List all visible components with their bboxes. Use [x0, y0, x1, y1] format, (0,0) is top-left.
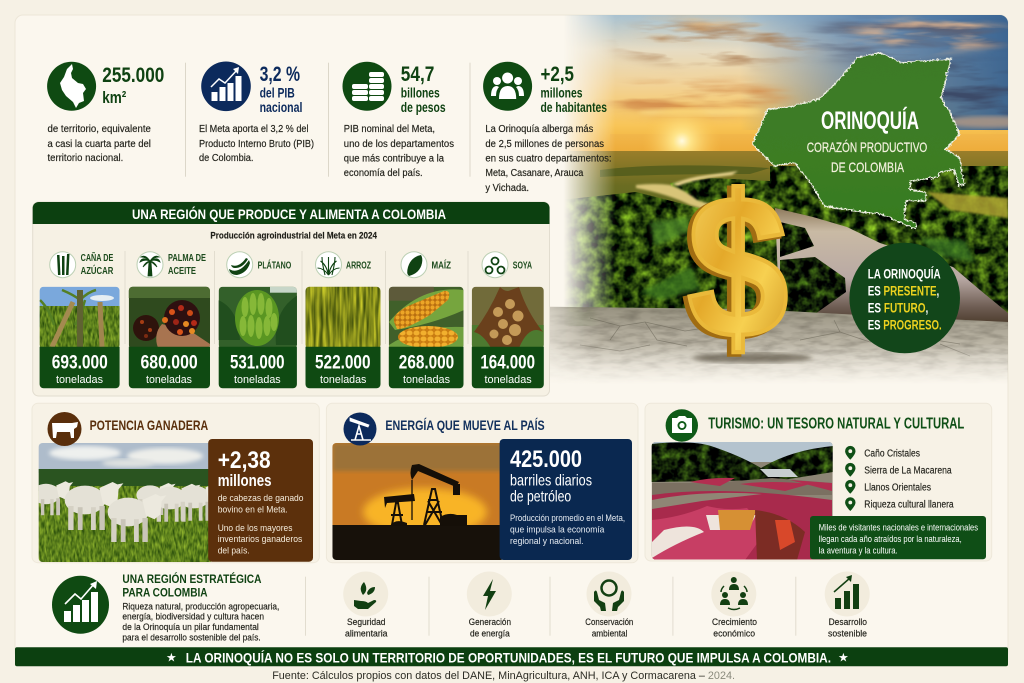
icon: bar chart trend [201, 62, 251, 111]
pillar: desarrollo sostenible [825, 572, 870, 638]
stat: territorio: territorio nacional. [48, 153, 123, 164]
callout: barriles diarios: que impulsa la economía [510, 524, 605, 536]
callout: cabezas de ganado: bovino en el Meta. [218, 504, 288, 516]
crop: soya: 164.000 [480, 352, 535, 374]
stat: PIB nacional: del PIB [260, 84, 295, 100]
divider [328, 63, 329, 177]
crop: maíz: 268.000 [399, 352, 454, 374]
heading bar [33, 202, 549, 224]
heading: POTENCIA GANADERA [90, 417, 208, 433]
divider [185, 63, 186, 177]
pillar: seguridad alimentaria: alimentaria [345, 628, 388, 638]
callout: barriles diarios [500, 439, 632, 560]
panel: turismo [645, 403, 992, 561]
closing banner: LA ORINOQUÍA NO ES SOLO UN TERRITORIO DE OPORTUNIDADES, ES EL FUTURO QUE IMPULSA A COLOMBIA. [186, 649, 831, 665]
callout: presente, futuro, progreso: ES PROGRESO. [868, 317, 942, 332]
callout: barriles diarios: de petróleo [510, 488, 571, 506]
callout: visitantes [810, 516, 986, 559]
map subtitle: DE COLOMBIA [831, 159, 904, 175]
photo: Caño Cristales [651, 442, 833, 560]
icon: cow [48, 412, 82, 446]
stat: habitantes: de 2,5 millones de personas [485, 139, 604, 150]
subtitle: Producción agroindustrial del Meta en 2024 [210, 230, 378, 241]
panel: energía [326, 403, 638, 563]
callout: visitantes: Miles de visitantes nacionales e internacionales [819, 522, 978, 533]
callout: barriles diarios: regional y nacional. [510, 536, 584, 547]
dollar shadow [692, 353, 812, 363]
pillar: generación de energía: de energía [470, 628, 510, 638]
crop: palma de aceite: PALMA DE [168, 253, 206, 264]
crop: palma de aceite: ACEITE [168, 266, 196, 277]
pillar: desarrollo sostenible: sostenible [828, 628, 867, 638]
stat: billones de pesos [342, 62, 454, 179]
crop: arroz [306, 252, 380, 388]
callout: barriles diarios: 425.000 [510, 446, 582, 473]
pillar: conservación ambiental: ambiental [592, 628, 628, 638]
callout: cabezas de ganado: Uno de los mayores [218, 523, 293, 534]
stat: PIB nacional: El Meta aporta el 3,2 % del [199, 124, 308, 135]
divider [470, 63, 471, 177]
crop: soya [472, 252, 544, 388]
panel: producción agroindustrial [33, 202, 549, 396]
closing banner: ★ [166, 650, 177, 664]
pillar: generación de energía [467, 572, 512, 638]
crop: palma de aceite: toneladas [146, 374, 192, 386]
pillar: seguridad alimentaria: Seguridad [347, 617, 386, 627]
icon: gold dollar sign: $ [683, 155, 784, 382]
callout: visitantes: llegan cada año atraídos por la naturaleza, [819, 534, 962, 545]
list: destinos: Caño Cristales [864, 448, 920, 459]
section: región estratégica: Riqueza natural, producción agropecuaria, [122, 601, 279, 611]
list: destinos: Sierra de La Macarena [864, 465, 952, 476]
callout: cabezas de ganado: de cabezas de ganado [218, 493, 304, 504]
section: región estratégica: para el desarrollo sostenible del país. [122, 633, 261, 643]
icon: Colombia silhouette [47, 62, 96, 111]
stat: billones de pesos: PIB nominal del Meta, [344, 124, 435, 135]
crop: plátano: toneladas [234, 374, 281, 386]
crop: plátano [218, 252, 298, 388]
stat: billones de pesos: uno de los departamentos [344, 139, 454, 150]
crop: plátano: PLÁTANO [258, 258, 291, 272]
crop: arroz: ARROZ [346, 260, 371, 272]
stat: territorio: 255.000 [102, 64, 164, 87]
photo: cattle [38, 443, 212, 562]
callout: barriles diarios: barriles diarios [510, 472, 592, 490]
crop: maíz: MAÍZ [432, 258, 451, 272]
crop: arroz: toneladas [320, 374, 367, 386]
crop: caña de azúcar: CAÑA DE [81, 251, 114, 264]
pillar: crecimiento económico: económico [713, 628, 755, 638]
stat: billones de pesos: billones [401, 84, 440, 100]
stat: habitantes: de habitantes [540, 99, 607, 115]
map title: ORINOQUÍA [821, 106, 919, 135]
crop: plátano: 531.000 [230, 352, 284, 374]
crop: caña de azúcar: AZÚCAR [81, 264, 114, 277]
icon: camera [666, 409, 698, 442]
icon: coins [342, 62, 392, 111]
callout: cabezas de ganado: +2,38 [218, 447, 271, 474]
stat: PIB nacional: nacional [260, 99, 302, 115]
crop: maíz [389, 252, 464, 388]
pillar: seguridad alimentaria [343, 572, 388, 638]
section: región estratégica: energía, biodiversidad y cultura hacen [122, 612, 264, 622]
icon: growth chart [52, 576, 109, 634]
icon: people [483, 62, 532, 111]
map subtitle: CORAZÓN PRODUCTIVO [807, 139, 927, 155]
pillar: crecimiento económico [711, 572, 757, 638]
stat: habitantes: millones [540, 84, 583, 100]
stat: territorio: a casi la cuarta parte del [48, 139, 151, 150]
stat: habitantes: en sus cuatro departamentos: [485, 154, 612, 164]
crop: caña de azúcar: toneladas [56, 374, 103, 386]
crop: palma de aceite [128, 252, 211, 388]
source: Fuente: Cálculos propios con datos del DANE, MinAgricultura, ANH, ICA y Cormacarena – 2024. [272, 670, 735, 682]
map: Orinoquía [752, 52, 963, 228]
pillar: conservación ambiental [585, 572, 633, 638]
callout: visitantes: la aventura y la cultura. [819, 546, 898, 557]
pillar: conservación ambiental: Conservación [585, 617, 633, 627]
crop: arroz: 522.000 [315, 352, 370, 374]
stat: PIB nacional [199, 62, 314, 164]
callout: cabezas de ganado: inventarios ganaderos [218, 534, 303, 545]
stat: habitantes: La Orinoquía alberga más [485, 124, 593, 135]
photo: oil pumpjack at sunset [332, 443, 504, 561]
stat: habitantes: +2,5 [540, 63, 574, 86]
icon: pumpjack [344, 412, 376, 446]
crop: maíz: toneladas [403, 374, 450, 386]
pillar: generación de energía: Generación [469, 617, 511, 627]
stat: billones de pesos: economía del país. [344, 168, 423, 179]
callout: presente, futuro, progreso: LA ORINOQUÍA [868, 266, 941, 281]
stat: habitantes [483, 62, 612, 194]
list: destinos [845, 446, 954, 511]
map subtitle [807, 139, 927, 175]
stat: territorio [47, 62, 164, 164]
stat: billones de pesos: 54,7 [401, 63, 434, 86]
crop: soya: toneladas [484, 374, 532, 386]
callout: barriles diarios: Producción promedio en el Meta, [510, 513, 625, 524]
stat: territorio: de territorio, equivalente [48, 124, 151, 135]
stat: PIB nacional: de Colombia. [199, 153, 254, 164]
crop: caña de azúcar [40, 251, 120, 388]
panel: potencia ganadera [32, 403, 319, 563]
callout: presente, futuro, progreso [849, 243, 960, 353]
callout: presente, futuro, progreso: ES FUTURO, [868, 301, 928, 316]
closing banner: ★ [838, 650, 849, 664]
hero image: Orinoquía landscape [550, 15, 1008, 380]
crop: palma de aceite: 680.000 [140, 352, 198, 374]
heading: ENERGÍA QUE MUEVE AL PAÍS [385, 417, 545, 433]
closing banner [15, 647, 1008, 666]
callout: presente, futuro, progreso: ES PRESENTE, [868, 284, 939, 299]
list: destinos: Riqueza cultural llanera [864, 500, 954, 511]
stat: habitantes: Meta, Casanare, Arauca [485, 168, 584, 179]
stat: PIB nacional: Producto Interno Bruto (PIB) [199, 139, 314, 150]
pillar: crecimiento económico: Crecimiento [712, 617, 757, 627]
stat: billones de pesos: que más contribuye a la [344, 154, 444, 164]
crop: caña de azúcar: 693.000 [52, 352, 108, 374]
section: región estratégica [52, 571, 279, 643]
section: región estratégica: UNA REGIÓN ESTRATÉGICA [122, 571, 262, 586]
stat: territorio: km² [102, 88, 127, 107]
stat: billones de pesos: de pesos [401, 99, 446, 115]
icon: gold dollar sign: $ [687, 153, 788, 380]
callout: cabezas de ganado: millones [218, 471, 272, 490]
list: destinos: Llanos Orientales [864, 482, 931, 493]
crop: soya: SOYA [513, 260, 532, 272]
section: región estratégica: de la Orinoquía un pilar fundamental [122, 622, 259, 632]
section: región estratégica: PARA COLOMBIA [122, 586, 208, 600]
callout: cabezas de ganado [208, 439, 313, 562]
stat: PIB nacional: 3,2 % [260, 63, 300, 86]
pillar: desarrollo sostenible: Desarrollo [829, 617, 867, 627]
callout: cabezas de ganado: del país. [218, 546, 250, 556]
heading bar: UNA REGIÓN QUE PRODUCE Y ALIMENTA A COLOMBIA [132, 205, 446, 222]
stat: habitantes: y Vichada. [485, 183, 529, 194]
